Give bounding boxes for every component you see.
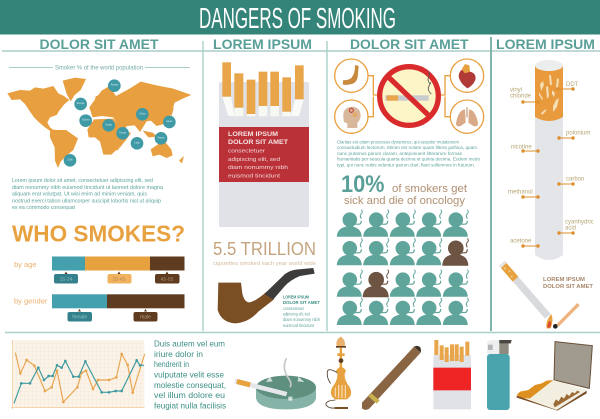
bar chart: by gender: by gender xyxy=(14,296,48,306)
statistic: 10 percent: 10% xyxy=(341,171,384,198)
text block: duis autem: iriure dolor in xyxy=(154,349,203,359)
text block: lorem ipsum xyxy=(12,178,163,211)
text block: lorem ipsum: ex ea commodo consequat xyxy=(12,205,76,211)
bar chart: by age: 45-65 xyxy=(161,277,174,283)
world map: China xyxy=(139,113,146,115)
world map: Russia xyxy=(111,85,119,87)
text block: pack label: diam nonummy nibh xyxy=(228,165,288,171)
text block: pipe note: consectetuer xyxy=(283,306,304,311)
labels: chemicals: chloride xyxy=(510,94,532,100)
title: DANGERS OF SMOKING xyxy=(199,3,396,35)
line chart xyxy=(11,340,145,409)
text block: duis autem: vel illum dolore eu xyxy=(154,390,225,400)
text block: pipe note: adipiscing elit, sed xyxy=(283,312,310,316)
icon: large cigarette xyxy=(535,60,563,260)
labels: chemicals: vinyl xyxy=(510,88,522,94)
icon: hookah xyxy=(326,337,351,409)
world map: Sudan xyxy=(105,124,113,126)
icon: heart xyxy=(459,64,476,88)
text block: pack label: consectetuer xyxy=(228,149,265,155)
text block: pack label: DOLOR SIT AMET xyxy=(228,140,288,146)
world map: Kenya xyxy=(119,132,127,134)
text block: pack label: euismod tincidunt xyxy=(228,173,280,179)
labels: chemicals: polonium xyxy=(566,130,590,136)
icon: cigar xyxy=(362,346,421,410)
bar chart: by age: 16-24 xyxy=(60,277,73,283)
panel: cigarette chemicals xyxy=(496,36,595,329)
icon: cigarette pack xyxy=(219,62,309,227)
bar chart: by gender: female xyxy=(72,315,87,321)
text block: claritas: typi, qui nunc nobis videntur parum clari, fiant sollemnes in futurum. xyxy=(337,162,475,167)
text: cigarette note xyxy=(543,277,594,290)
text block: claritas: nunc putamus parum claram, anteposuerit litterarum formas xyxy=(337,151,463,156)
icon: lungs xyxy=(456,107,478,126)
text block: lorem ipsum: Lorem ipsum dolor sit amet, consectetuer adipiscing elit, sed xyxy=(12,178,153,184)
icon: pipe xyxy=(218,268,315,323)
text block: pipe note: LOREM IPSUM xyxy=(283,294,309,300)
world map: Europe xyxy=(77,102,85,105)
callouts: chemical labels xyxy=(521,87,575,248)
map caption: Smoker % of the world population xyxy=(55,66,143,72)
text block: duis autem xyxy=(154,338,226,410)
text block: pipe note: diam nonummy nibh xyxy=(283,317,321,322)
bar chart: by gender: male xyxy=(140,315,151,321)
world map: Japan xyxy=(166,121,173,123)
text block: duis autem: feugiat nulla facilisis xyxy=(154,400,226,410)
text block: pack label: adipiscing elit, sed xyxy=(228,157,280,163)
world map: Chile xyxy=(67,159,73,161)
text block: duis autem: Duis autem vel eum xyxy=(154,338,225,348)
text block: lorem ipsum: diam nonummy nibh euismod tincidunt ut laoreet dolore magna xyxy=(12,185,163,191)
text block: claritas: consuetudium lectorum. Mirum est notare quam littera gothica, quam xyxy=(337,145,477,150)
icon: small cigarette pack xyxy=(433,340,471,409)
panel: world map and who smokes xyxy=(7,36,191,322)
text block: duis autem: hendrerit in xyxy=(154,359,189,369)
bar chart: by age: 25-45 xyxy=(113,277,126,283)
icon: matchbox xyxy=(517,342,592,411)
icon: brain in head xyxy=(343,107,361,128)
text: cigarette note: DOLOR SIT AMET xyxy=(543,284,594,290)
caption: smokers oncology xyxy=(344,183,467,207)
world map: Papua xyxy=(158,137,165,139)
panel: cigarette pack and pipe xyxy=(213,36,321,328)
bar chart: by gender xyxy=(14,294,184,322)
labels: chemicals: acetone xyxy=(510,238,532,244)
text block: pack label xyxy=(228,132,288,179)
bar chart: by age xyxy=(14,256,184,284)
caption: smokers oncology: of smokers get xyxy=(392,183,467,195)
text block: pipe note: DOLOR SIT AMET xyxy=(283,300,320,305)
icon: no smoking sign xyxy=(380,67,438,125)
text: cigarette note: LOREM IPSUM xyxy=(543,277,585,283)
heading: lorem ipsum: LOREM IPSUM xyxy=(496,36,595,52)
text block: pipe note xyxy=(283,294,321,328)
bar chart: by age: by age xyxy=(14,260,37,269)
labels: chemicals: methanol xyxy=(508,190,533,196)
caption: smokers oncology: sick and die of oncology xyxy=(344,195,465,207)
text block: claritas: Claritas est etiam processus dynamicus, qui sequitur mutationem xyxy=(337,140,459,144)
text block: lorem ipsum: nostrud exerci tation ullamcorper suscipit lobortis nisl ut aliquip xyxy=(12,198,161,204)
icon: cigarette and match xyxy=(499,261,580,329)
heading: lorem ipsum: LOREM IPSUM xyxy=(213,36,312,52)
text block: claritas: humanitatis per seacula quarta decima et quinta decima. Eodem modo xyxy=(337,157,480,162)
diagram: organs and no smoking sign xyxy=(335,59,484,133)
icon: lighter xyxy=(487,340,512,410)
panel: health effects xyxy=(335,36,484,325)
icon: ashtray xyxy=(234,358,316,409)
labels: chemicals: acid xyxy=(565,226,576,232)
header banner xyxy=(0,0,600,35)
world map: India xyxy=(134,142,140,144)
statistic: 5.5 trillion: 5.5 TRILLION xyxy=(213,239,316,259)
world map xyxy=(7,78,191,168)
text block: duis autem: vulputate velit esse xyxy=(154,370,224,380)
heading: dolor sit amet: DOLOR SIT AMET xyxy=(350,36,469,52)
caption: cigarettes smoked: cigarettes smoked each year world wide xyxy=(213,261,316,267)
world map: Guinea xyxy=(82,120,90,122)
text block: lorem ipsum: aliquam erat volutpat. Ut wisi enim ad minim veniam, quis xyxy=(12,192,147,198)
pictogram: smokers grid xyxy=(337,210,468,325)
labels: chemicals: cyanhydric xyxy=(565,220,594,226)
icon: stomach xyxy=(343,65,359,85)
labels: chemicals: DDT xyxy=(566,82,579,88)
labels: chemicals: carbon xyxy=(566,176,584,182)
text block: pipe note: euismod tincidunt xyxy=(283,323,315,328)
text block: duis autem: molestie consequat, xyxy=(154,380,226,390)
labels: chemicals xyxy=(508,82,594,244)
text block: claritas xyxy=(337,140,480,167)
text block: pack label: LOREM IPSUM xyxy=(228,132,278,138)
labels: chemicals: nicotine xyxy=(511,144,532,150)
heading: who smokes: WHO SMOKES? xyxy=(12,220,185,246)
heading: dolor sit amet: DOLOR SIT AMET xyxy=(40,36,159,52)
